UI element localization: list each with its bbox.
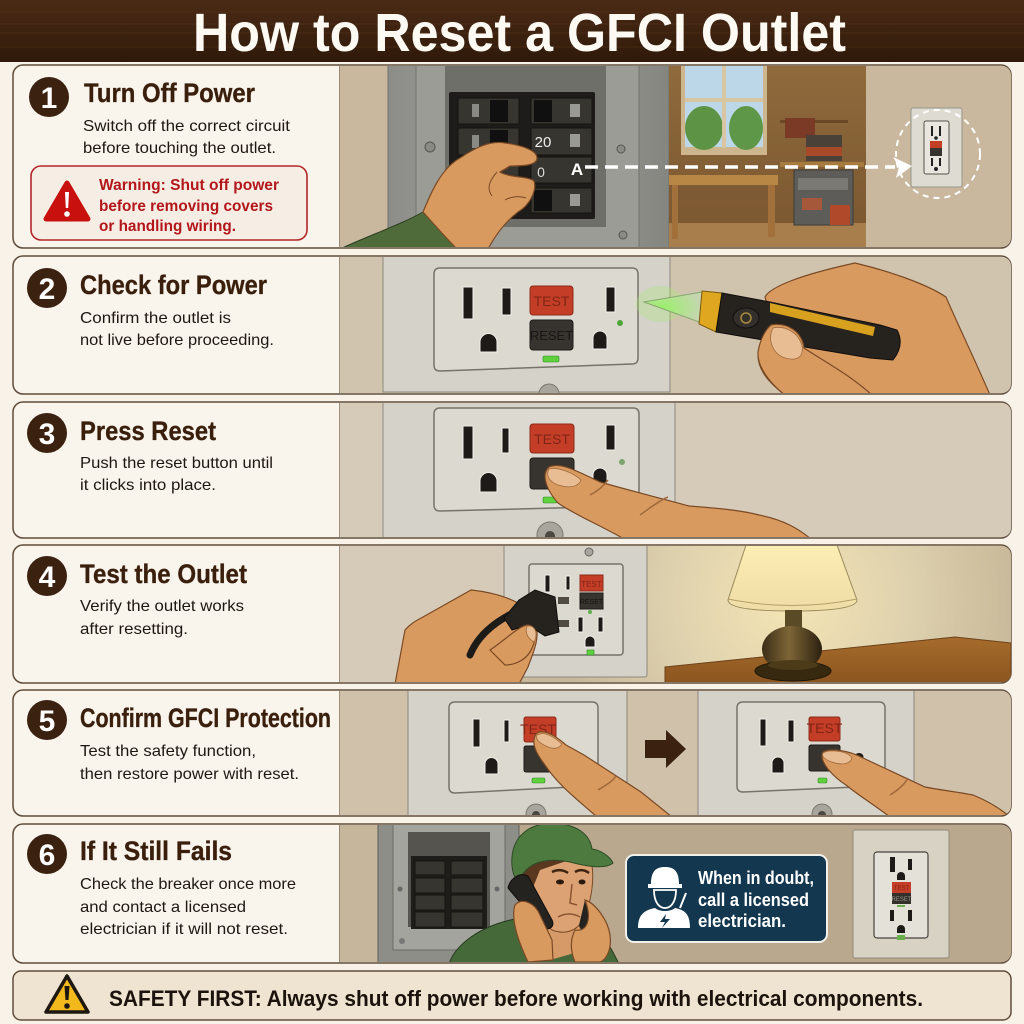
outlet: [504, 540, 647, 677]
illustration: outlet and voltage tester: [339, 257, 1011, 393]
sign text: call a licensed: [698, 890, 809, 910]
breaker panel: 0: [537, 164, 545, 180]
step 6 description: [80, 876, 296, 938]
step 4 number badge: [27, 556, 67, 596]
outlet: [382, 257, 670, 393]
step 3 description: it clicks into place.: [80, 477, 216, 494]
warning callout: [31, 166, 307, 240]
step 5 description: then restore power with reset.: [80, 766, 299, 783]
hand turning breaker off: [340, 142, 537, 249]
icon: electrician: [638, 867, 690, 928]
breaker panel: [388, 65, 669, 249]
panel: step 1 turn off power: [13, 65, 1011, 249]
outlet pressing test: [408, 691, 670, 815]
outlet: RESET: [580, 599, 604, 606]
step 5 description: Test the safety function,: [80, 743, 256, 760]
step 2 number badge: [27, 268, 67, 308]
outlet: TEST: [534, 431, 570, 447]
step 1 description: before touching the outlet.: [83, 140, 276, 157]
step 2 heading: Check for Power: [80, 270, 267, 300]
header banner: [0, 0, 1024, 63]
outlet: TEST: [581, 580, 602, 589]
step 6 number badge: 6: [39, 839, 55, 872]
icon: caution triangle: [46, 976, 88, 1012]
step 3 description: Push the reset button until: [80, 455, 273, 472]
step 5 number badge: [27, 700, 67, 740]
step 1 number badge: [29, 77, 69, 117]
lamp on table: [665, 545, 1011, 683]
step 2 description: [80, 310, 274, 349]
warning text: [99, 177, 279, 235]
breaker panel: [378, 820, 519, 963]
step 1 description: [83, 118, 291, 157]
step 6 description: Check the breaker once more: [80, 876, 296, 893]
outlet: TEST: [534, 293, 570, 309]
step 4 description: Verify the outlet works: [80, 598, 244, 615]
outlet: [382, 403, 676, 537]
step 1 description: Switch off the correct circuit: [83, 118, 291, 135]
illustration: call an electrician: [339, 820, 1011, 964]
step 2 description: Confirm the outlet is: [80, 310, 231, 327]
panel: step 3 press reset: [13, 396, 1011, 548]
outlet pressing reset: [698, 691, 1007, 815]
step 4 description: after resetting.: [80, 621, 188, 638]
step 6 heading: If It Still Fails: [80, 836, 232, 866]
step 5 number badge: 5: [39, 705, 55, 738]
illustration: plug and lit lamp: [339, 540, 1011, 684]
breaker panel: 20: [535, 134, 551, 151]
illustration: test then reset: [339, 691, 1011, 815]
sign text: electrician.: [698, 911, 786, 931]
step 5 description: [80, 743, 299, 783]
step 3 number badge: 3: [39, 418, 55, 451]
outlet: TEST: [894, 886, 909, 892]
footer: safety first banner: [13, 971, 1011, 1020]
step 3 number badge: [27, 413, 67, 453]
outlet: RESET: [530, 328, 573, 343]
step 4 number badge: 4: [39, 561, 56, 594]
outlet pressing test: TEST: [520, 721, 556, 737]
sign: when in doubt: [626, 855, 827, 942]
step 6 description: electrician if it will not reset.: [80, 921, 288, 938]
hand inserting plug: [395, 590, 569, 684]
safety message: SAFETY FIRST: Always shut off power before working with electrical components.: [109, 986, 923, 1011]
outlet: [853, 830, 949, 958]
warning text: Warning: Shut off power: [99, 177, 279, 194]
outlet with dashed highlight circle: [896, 108, 980, 198]
step 2 number badge: 2: [39, 273, 55, 306]
hand pressing reset button: [545, 465, 811, 539]
panel: step 4 test the outlet: [13, 540, 1011, 684]
step 3 heading: Press Reset: [80, 416, 216, 446]
sign text: When in doubt,: [698, 868, 814, 888]
step 4 description: [80, 598, 244, 638]
step 3 description: [80, 455, 273, 494]
title: How to Reset a GFCI Outlet: [193, 3, 846, 63]
workshop room: [669, 65, 866, 249]
step 4 heading: Test the Outlet: [80, 559, 247, 589]
step 2 description: not live before proceeding.: [80, 332, 274, 349]
warning text: or handling wiring.: [99, 218, 236, 235]
panel: step 2 check for power: [13, 250, 1011, 404]
hand holding voltage tester: [636, 263, 990, 395]
step 6 description: and contact a licensed: [80, 899, 246, 916]
outlet: RESET: [891, 897, 912, 903]
warning text: before removing covers: [99, 198, 273, 215]
panel: step 5 confirm GFCI protection: [13, 685, 1011, 824]
step 1 heading: Turn Off Power: [84, 78, 255, 108]
step 6 number badge: [27, 834, 67, 874]
sign text: [698, 870, 813, 927]
step 5 heading: Confirm GFCI Protection: [80, 703, 331, 733]
breaker panel: A: [571, 160, 583, 179]
outlet pressing reset: TEST: [807, 720, 843, 736]
arrow: test to reset: [645, 730, 686, 768]
panel: step 6 if it still fails: [13, 820, 1011, 964]
electrician on phone: [449, 823, 619, 964]
icon: warning triangle: [46, 183, 88, 219]
illustration: finger pressing reset: [339, 403, 1011, 537]
arrow: dashed arrow to outlet: [585, 157, 912, 178]
step 1 number badge: 1: [41, 82, 57, 115]
illustration: breaker panel, workshop and outlet: [339, 65, 1011, 249]
